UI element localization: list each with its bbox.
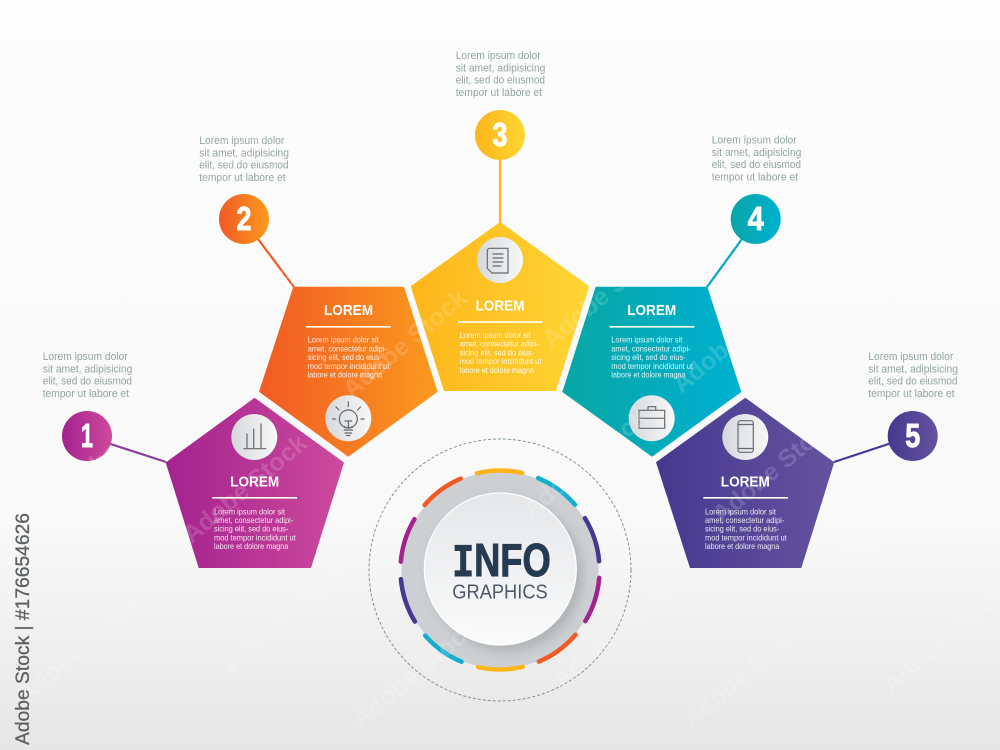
caption 1: elit, sed do eiusmod	[43, 376, 132, 388]
caption 5: Lorem ipsum dolor	[868, 351, 954, 363]
number badge 2	[219, 194, 269, 244]
watermarks: Adobe Stock	[867, 234, 1000, 354]
caption 4: tempor ut labore et	[712, 171, 798, 183]
icon: document	[477, 237, 523, 283]
watermarks: Adobe Stock	[497, 109, 632, 229]
watermarks: Adobe Stock	[47, 389, 182, 509]
body text 1: sicing elit, sed do eius-	[214, 525, 289, 534]
number badge 1	[62, 411, 112, 461]
watermarks: Adobe Stock	[167, 99, 302, 219]
caption 3: sit amet, adipisicing	[456, 62, 545, 74]
heading 2: LOREM	[324, 302, 373, 319]
watermarks: Adobe Stock	[537, 234, 672, 354]
body text 2: amet, consectetur adipi-	[308, 344, 387, 353]
pentagon 4	[562, 287, 741, 457]
icon: bar chart	[231, 414, 277, 460]
subtitle GRAPHICS: GRAPHICS	[452, 581, 548, 603]
coloured arc segments	[360, 430, 640, 710]
body text 2	[308, 336, 390, 380]
body text 1: mod tempor incididunt ut	[214, 533, 296, 542]
number badge 4	[731, 194, 781, 244]
caption 4: elit, sed do eiusmod	[712, 159, 801, 171]
number badge 2: 2	[236, 200, 252, 237]
heading 3: LOREM	[476, 298, 524, 315]
stock id label: Adobe Stock | #176654626	[13, 513, 34, 745]
watermarks: Adobe Stock	[217, 559, 352, 679]
number badge 5	[888, 411, 938, 461]
body text 3: amet, consectetur adipi-	[460, 340, 539, 349]
number badge 3: 3	[492, 116, 508, 153]
body text 2: labore et dolore magna	[308, 371, 382, 380]
panel: step 4	[562, 287, 741, 457]
dashed orbit	[369, 439, 631, 701]
panel: step 2	[259, 287, 438, 457]
body text 4: labore et dolore magna	[611, 371, 686, 380]
pentagon 1	[166, 398, 344, 568]
body text 1: labore et dolore magna	[214, 542, 289, 551]
pentagon 2	[259, 287, 438, 457]
body text 1	[214, 507, 296, 551]
watermarks: Adobe Stock	[37, 59, 172, 179]
caption 2: tempor ut labore et	[199, 172, 286, 184]
caption 2: sit amet, adipisicing	[199, 147, 289, 159]
caption 3: Lorem ipsum dolor	[456, 50, 541, 62]
caption 4: Lorem ipsum dolor	[712, 134, 797, 146]
icon: light bulb	[325, 395, 371, 441]
caption 3: elit, sed do eiusmod	[456, 75, 545, 87]
caption 1: tempor ut labore et	[43, 388, 129, 400]
number badge 3	[475, 110, 525, 160]
panel: step 5	[656, 398, 834, 568]
body text 5: Lorem ipsum dolor sit	[705, 507, 777, 516]
body text 4	[611, 336, 694, 380]
gray ring	[402, 472, 598, 668]
caption 1: Lorem ipsum dolor	[43, 351, 128, 363]
body text 5: sicing elit, sed do eius-	[705, 525, 780, 534]
caption 5: sit amet, adipisicing	[868, 363, 958, 375]
number badge 4: 4	[748, 200, 764, 237]
number badge 5: 5	[905, 417, 920, 454]
body text 4: mod tempor incididunt ut	[611, 362, 694, 371]
caption 2: elit, sed do eiusmod	[199, 160, 289, 172]
caption 1: sit amet, adipisicing	[43, 363, 132, 375]
caption 3	[456, 50, 545, 99]
watermarks: Adobe Stock	[207, 229, 342, 349]
connector lines	[109, 158, 890, 462]
caption 1	[43, 351, 132, 400]
watermarks: Adobe Stock	[2, 259, 137, 379]
body text 4: Lorem ipsum dolor sit	[611, 336, 683, 345]
watermarks: Adobe Stock	[697, 69, 832, 189]
caption 2	[199, 135, 289, 184]
watermarks: Adobe Stock	[12, 589, 147, 709]
watermarks: Adobe Stock	[827, 119, 962, 239]
body text 3: labore et dolore magna	[460, 366, 534, 375]
body text 2: mod tempor incididunt ut	[308, 362, 390, 371]
centre disc	[424, 493, 576, 645]
title INFO: INFO	[452, 534, 551, 590]
watermarks: Adobe Stock	[547, 574, 682, 694]
body text 1: Lorem ipsum dolor sit	[214, 507, 286, 516]
watermarks: Adobe Stock	[347, 614, 482, 734]
watermarks: Adobe Stock	[837, 449, 972, 569]
caption 2: Lorem ipsum dolor	[199, 135, 285, 147]
number badge 1: 1	[81, 417, 93, 454]
body text 2: Lorem ipsum dolor sit	[308, 336, 379, 345]
central hub	[360, 430, 640, 710]
body text 2: sicing elit, sed do eius-	[308, 353, 382, 362]
heading 4: LOREM	[627, 302, 676, 319]
icon: briefcase	[629, 395, 675, 441]
watermarks: Adobe Stock	[367, 414, 502, 534]
body text 4: sicing elit, sed do eius-	[611, 353, 686, 362]
pentagon 5	[656, 398, 834, 568]
body text 1: amet, consectetur adipi-	[214, 516, 294, 525]
body text 5: labore et dolore magna	[705, 542, 780, 551]
pentagon 3	[411, 222, 589, 391]
body text 3: mod tempor incididunt ut	[460, 357, 542, 366]
panel: step 1	[166, 398, 344, 568]
body text 3: sicing elit, sed do eius-	[460, 348, 534, 357]
body text 3	[460, 331, 542, 375]
panel: step 3	[411, 222, 589, 391]
caption 5	[868, 351, 958, 400]
heading 5: LOREM	[721, 474, 770, 491]
caption 4: sit amet, adipisicing	[712, 147, 801, 159]
watermarks: Adobe Stock	[667, 279, 802, 399]
body text 3: Lorem ipsum dolor sit	[460, 331, 531, 340]
caption 5: elit, sed do eiusmod	[868, 376, 958, 388]
body text 4: amet, consectetur adipi-	[611, 344, 691, 353]
body text 5	[705, 507, 787, 551]
watermarks: Adobe Stock	[707, 409, 842, 529]
watermarks: Adobe Stock	[177, 429, 312, 549]
caption 3: tempor ut labore et	[456, 87, 542, 99]
watermarks: Adobe Stock	[337, 284, 472, 404]
watermarks: Adobe Stock	[517, 404, 652, 524]
heading 1: LOREM	[230, 474, 279, 491]
watermarks: Adobe Stock	[677, 614, 812, 734]
body text 5: mod tempor incididunt ut	[705, 533, 787, 542]
caption 4	[712, 134, 801, 183]
icon: smartphone	[722, 414, 768, 460]
watermarks: Adobe Stock	[372, 69, 507, 189]
body text 5: amet, consectetur adipi-	[705, 516, 785, 525]
caption 5: tempor ut labore et	[868, 388, 955, 400]
